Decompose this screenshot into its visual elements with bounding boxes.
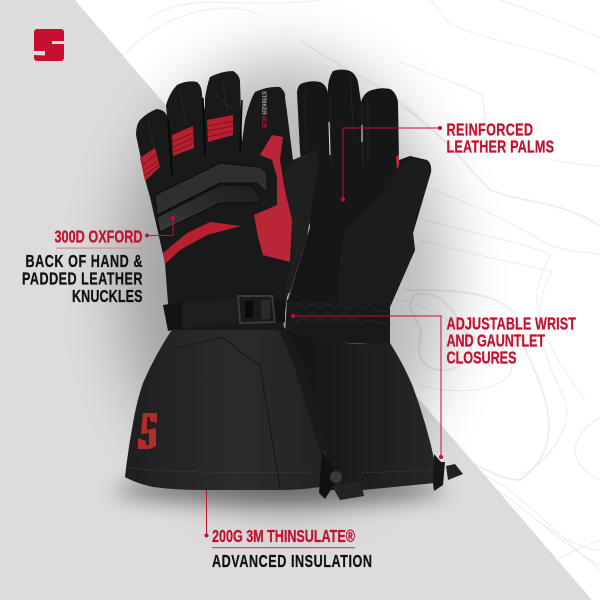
text: advanced insulation: ADVANCED INSULATION (212, 552, 372, 572)
elastic wrinkles (292, 303, 388, 325)
finger gaps (168, 98, 242, 175)
finger seams (305, 76, 368, 170)
left cuff (125, 325, 328, 490)
right hem stitch (362, 470, 434, 473)
ridge lines (142, 121, 233, 176)
red side panel (254, 135, 292, 262)
finger seams (148, 80, 235, 160)
red strip (163, 222, 241, 264)
callout leader: insulation (204, 490, 208, 538)
right glove: palm side (284, 70, 463, 491)
thumb (338, 157, 431, 307)
glove shadow (115, 55, 450, 505)
cuff hem stitch (128, 468, 315, 472)
hand body and fingers (136, 71, 319, 330)
text: reinforced leather palms: LEATHER PALMS (446, 137, 554, 157)
red finger ridges (140, 115, 233, 181)
callout leader: palm (341, 126, 442, 202)
text: 300D Oxford: 300D OXFORD (54, 227, 142, 247)
callout leader: back of hand (145, 216, 175, 238)
text: back of hand: KNUCKLES (72, 287, 142, 307)
text: adjustable wrist: ADJUSTABLE WRIST (446, 314, 576, 334)
elastic wrist (285, 300, 390, 345)
callout leader: wrist and gauntlet (291, 314, 443, 459)
cuff fold (278, 325, 328, 452)
brand text on finger: STRIKER (260, 91, 267, 115)
palm and fingers (285, 70, 431, 335)
right gauntlet cuff (284, 330, 435, 490)
text: reinforced leather palms: REINFORCED (446, 120, 533, 140)
logo (34, 29, 64, 61)
text: adjustable wrist: AND GAUNTLET (446, 331, 545, 351)
thumb side flap (284, 150, 319, 298)
text: back of hand: PADDED LEATHER (22, 269, 142, 289)
text: adjustable wrist: CLOSURES (446, 348, 516, 368)
text: back of hand (22, 252, 142, 307)
finger gaps (329, 122, 362, 155)
left glove: back of hand (125, 71, 364, 500)
text: 200g thinsulate: 200G 3M THINSULATE® (212, 527, 355, 547)
cuff seam (178, 337, 280, 488)
text: reinforced leather palms (446, 120, 554, 157)
wrist strap and buckle (163, 296, 285, 331)
center cord lock (319, 452, 364, 500)
text: adjustable wrist (446, 314, 576, 368)
padded leather knuckles (155, 163, 267, 232)
text: back of hand: BACK OF HAND & (26, 252, 142, 272)
cuff logo (138, 413, 157, 449)
right cord lock (433, 454, 463, 491)
brand text on finger: ICE (260, 116, 267, 130)
red palm edge (396, 154, 399, 170)
